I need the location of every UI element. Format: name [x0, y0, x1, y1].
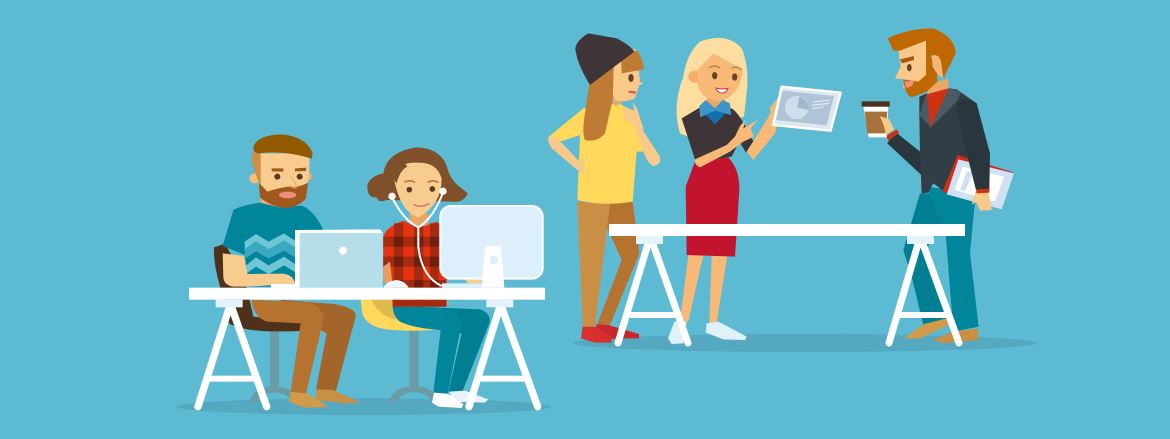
- side hair fade: [252, 152, 261, 186]
- trousers: [597, 202, 639, 325]
- arm: [223, 253, 295, 287]
- shoes: [706, 322, 747, 340]
- shoes: [904, 318, 948, 338]
- shirt: [383, 221, 447, 307]
- collar: [705, 110, 725, 124]
- jacket body: [919, 88, 987, 193]
- face: [258, 153, 309, 202]
- head: [895, 40, 930, 88]
- standing table: [609, 224, 965, 343]
- monitor: [440, 206, 543, 288]
- sneakers: [449, 391, 488, 403]
- pointing arm: [695, 119, 758, 167]
- person: bearded man: [223, 134, 360, 407]
- checks: [383, 223, 447, 307]
- trousers far leg: [280, 300, 356, 392]
- tablet: [773, 87, 841, 131]
- floor shadow right: [573, 334, 1037, 352]
- back leg: [903, 193, 947, 325]
- face: [610, 49, 643, 101]
- far hand: [632, 120, 660, 166]
- scene: two people seated at a desk: [176, 134, 551, 415]
- neck: [261, 190, 295, 206]
- cuffs: [976, 189, 989, 193]
- neck: [612, 92, 622, 106]
- neck: [707, 92, 725, 112]
- laptop: [271, 229, 383, 288]
- sneakers: [595, 324, 639, 339]
- arm: [383, 262, 393, 287]
- hair top: [253, 134, 313, 159]
- ear: [932, 55, 943, 78]
- hand at chin: [623, 102, 644, 130]
- pie chart: [785, 96, 808, 119]
- blouse: [682, 107, 753, 163]
- trousers near leg: [252, 300, 323, 393]
- desk: [189, 288, 545, 407]
- lapels: [919, 88, 961, 128]
- neck: [410, 213, 428, 228]
- t-shirt: [223, 203, 323, 287]
- hair back: [677, 38, 747, 136]
- floor shadow left: [176, 398, 551, 415]
- eyes and brows: [274, 174, 280, 180]
- hand at folder: [972, 192, 992, 211]
- hair: [583, 58, 614, 141]
- person: woman with earphones: [367, 147, 490, 408]
- top: [548, 103, 643, 204]
- coffee cup: [862, 101, 890, 137]
- hair back: [367, 147, 468, 202]
- undershirt: [924, 88, 948, 130]
- ear: [249, 173, 259, 183]
- face: [688, 71, 700, 83]
- beard: [259, 183, 308, 208]
- waist arm: [548, 137, 588, 174]
- front leg: [927, 187, 979, 332]
- chair: dark brown: [214, 244, 328, 402]
- legs: [680, 255, 703, 322]
- jeans: [417, 307, 490, 393]
- beanie: [575, 33, 634, 85]
- person: man with coffee and folder: [862, 28, 1014, 343]
- chair: yellow: [361, 300, 441, 402]
- tablet arm: [747, 97, 783, 160]
- folder: [942, 155, 1013, 209]
- face: [394, 163, 442, 217]
- sleeve: [957, 99, 990, 190]
- earphones: [392, 192, 443, 286]
- jacket forearm: [887, 132, 921, 175]
- eye and lips: [628, 74, 634, 82]
- hand with cup: [880, 116, 894, 135]
- text lines: [812, 100, 830, 109]
- chevrons: [245, 233, 295, 249]
- neck: [927, 78, 948, 97]
- person: blonde woman with tablet: [668, 38, 783, 344]
- eyes and mouth: [712, 72, 717, 79]
- shoes: [315, 389, 360, 403]
- beard: [903, 53, 937, 97]
- person: woman in beanie and yellow top: [548, 33, 660, 343]
- eyes and brows: [406, 187, 412, 192]
- hair: [888, 28, 956, 78]
- eye and brow: [907, 64, 912, 71]
- skirt: [686, 157, 739, 257]
